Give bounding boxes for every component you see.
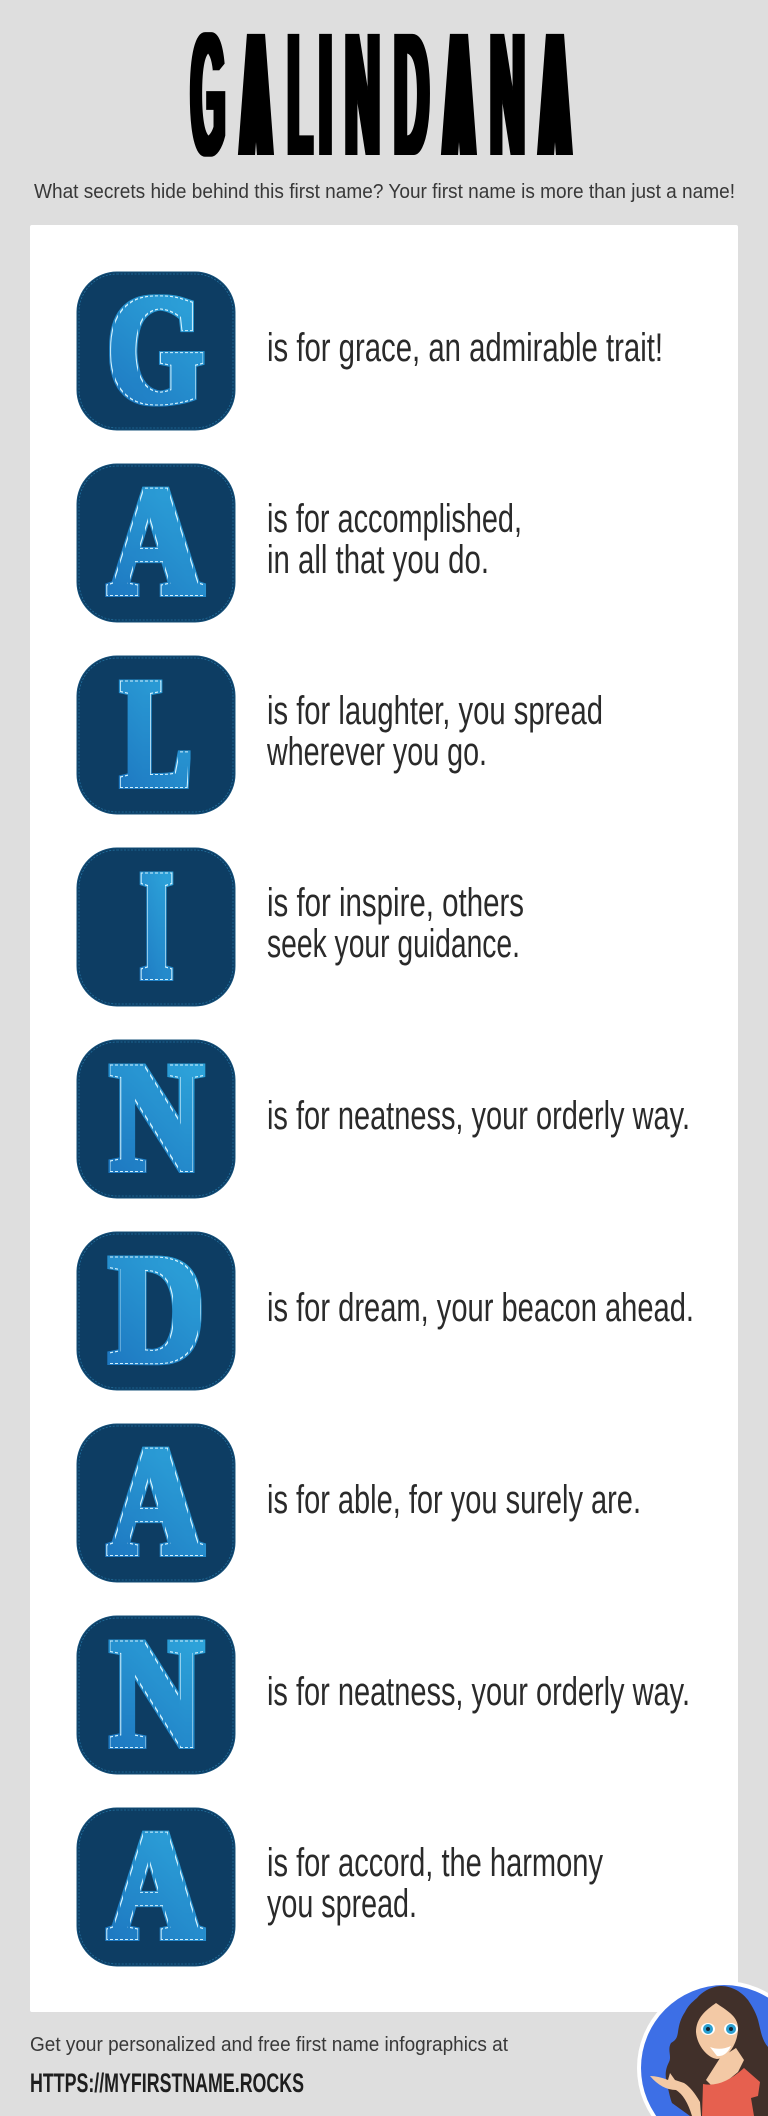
panel: letter meanings <box>30 225 738 2012</box>
row: I: seek your guidance. <box>267 922 520 966</box>
row: A (able): is for able, for you surely are. <box>267 1478 641 1522</box>
row: L: is for laughter, you spread <box>267 689 603 733</box>
row: L <box>77 647 603 819</box>
row: A (able) <box>77 1415 641 1587</box>
title: D <box>394 0 429 193</box>
subtitle: What secrets hide behind this first name? Your first name is more than just a name! <box>34 181 735 203</box>
row: I: I <box>141 839 172 1011</box>
row: A (accord) <box>77 1799 603 1971</box>
row: A (accomplished) <box>77 455 522 627</box>
row: A (accomplished): in all that you do. <box>267 538 489 582</box>
title: A <box>446 0 472 193</box>
row: N (neatness 2) <box>77 1607 690 1779</box>
icon: avatar <box>637 1981 768 2116</box>
row: A (accomplished): A <box>108 455 203 627</box>
footer text: Get your personalized and free first name infographics at <box>30 2034 508 2056</box>
row: A (accord): A <box>108 1799 203 1971</box>
title: L <box>288 0 312 193</box>
title: I <box>319 0 332 193</box>
row: I: is for inspire, others <box>267 881 524 925</box>
title: N <box>345 0 380 193</box>
text: A <box>542 0 568 193</box>
footer url: HTTPS://MYFIRSTNAME.ROCKS <box>30 2068 304 2098</box>
row: L: wherever you go. <box>266 730 487 774</box>
title: A <box>243 0 269 193</box>
row: N (neatness) <box>77 1031 690 1203</box>
row: A (accomplished): is for accomplished, <box>267 497 522 541</box>
row: D: D <box>109 1223 204 1395</box>
row: N (neatness 2): N <box>110 1607 203 1779</box>
row: I <box>77 839 524 1011</box>
row: A (able): A <box>108 1415 203 1587</box>
row: G: G <box>107 263 204 435</box>
row: G <box>77 263 663 435</box>
row: A (accord): is for accord, the harmony <box>267 1841 603 1885</box>
row: A (accord): you spread. <box>267 1882 417 1926</box>
row: D <box>77 1223 694 1395</box>
title: G <box>191 0 225 193</box>
row: L: L <box>121 647 191 819</box>
title: N <box>490 0 525 193</box>
title <box>191 0 568 193</box>
row: N (neatness): N <box>110 1031 203 1203</box>
